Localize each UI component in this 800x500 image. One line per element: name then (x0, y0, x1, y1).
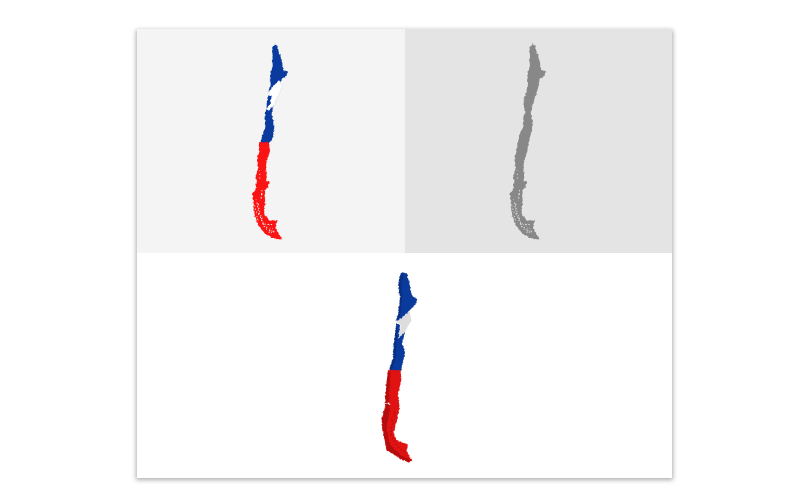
small blue region (267, 96, 272, 108)
white region (396, 311, 412, 340)
southern island gaps (254, 170, 274, 234)
central blue region (260, 106, 274, 143)
white notch (384, 402, 390, 404)
south red shade (382, 371, 412, 462)
island gaps (512, 170, 532, 234)
south red region (253, 142, 282, 239)
map: Chile flag colours flat (253, 44, 288, 239)
map: Chile flag colours 3D extruded (382, 272, 417, 462)
north blue shade (396, 273, 404, 320)
grey silhouette body (510, 44, 546, 239)
panel: top right grey (405, 29, 672, 253)
panel: bottom white (137, 253, 672, 478)
north blue region (268, 44, 288, 92)
white region (267, 80, 282, 110)
map: Chile grey silhouette (510, 44, 546, 239)
panel: top left light grey (137, 29, 405, 253)
north blue region (396, 272, 417, 320)
south red region (382, 370, 412, 462)
central blue region (388, 323, 405, 372)
central blue shade (388, 323, 398, 372)
inner island texture (391, 412, 406, 453)
